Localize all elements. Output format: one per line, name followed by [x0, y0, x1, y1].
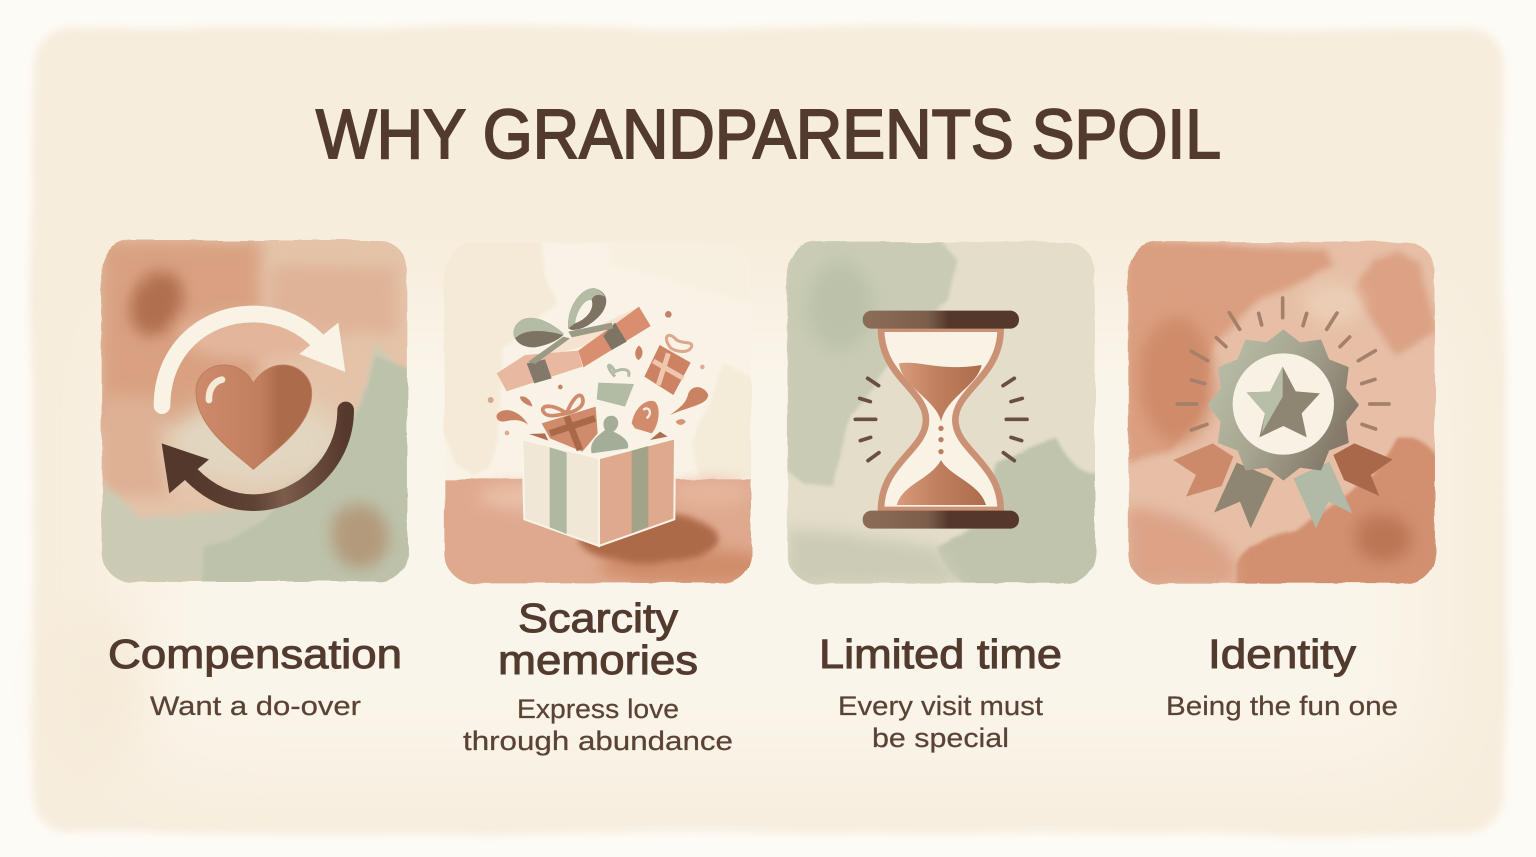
watercolor wash: medal — [1126, 240, 1436, 585]
bottom bar — [863, 511, 1019, 529]
side ribbons — [1173, 443, 1393, 528]
arrow: cream upper — [162, 314, 345, 406]
icon: hourglass — [855, 311, 1027, 529]
heading: Scarcity — [518, 595, 679, 641]
description: Every visit must — [838, 691, 1044, 721]
small gifts — [542, 335, 692, 453]
heading — [498, 595, 698, 683]
arrow: dark lower — [162, 410, 346, 503]
panel: limited time — [786, 240, 1096, 585]
icon: gift box — [488, 288, 708, 546]
heading: Identity — [1208, 631, 1357, 677]
column: scarcity text — [463, 595, 733, 756]
description: Being the fun one — [1166, 691, 1398, 721]
description: Express love — [517, 694, 679, 724]
description — [463, 694, 733, 756]
title: WHY GRANDPARENTS SPOIL — [316, 95, 1221, 173]
column: identity text — [1166, 631, 1398, 721]
star — [1247, 367, 1320, 437]
sand bottom — [897, 460, 986, 505]
heading: memories — [498, 637, 698, 683]
top bar — [863, 311, 1019, 329]
panel: scarcity memories — [443, 244, 752, 584]
icon: rosette medal — [1173, 298, 1393, 528]
column: compensation text — [108, 631, 402, 721]
heading: Compensation — [108, 631, 402, 677]
confetti — [488, 311, 708, 435]
panel: compensation — [100, 239, 409, 583]
description — [838, 691, 1044, 753]
rays — [1177, 298, 1389, 430]
time ticks — [855, 378, 1027, 461]
column: limited time text — [819, 631, 1062, 753]
watercolor wash: hourglass — [786, 240, 1096, 585]
icon: heart — [196, 365, 312, 469]
description: be special — [872, 723, 1009, 753]
heading: Limited time — [819, 631, 1062, 677]
icon: cycle arrows around heart — [162, 314, 346, 503]
gift lid — [497, 288, 651, 391]
glass — [881, 329, 1001, 510]
description: Want a do-over — [150, 691, 361, 721]
watercolor wash: compensation — [100, 239, 409, 583]
box body — [522, 432, 675, 546]
watercolor wash: gift — [443, 244, 752, 584]
sand top — [899, 363, 982, 422]
falling grains — [938, 426, 944, 454]
description: through abundance — [463, 726, 733, 756]
medal disc — [1233, 353, 1334, 455]
rosette — [1209, 331, 1357, 479]
panel: identity — [1126, 240, 1436, 585]
